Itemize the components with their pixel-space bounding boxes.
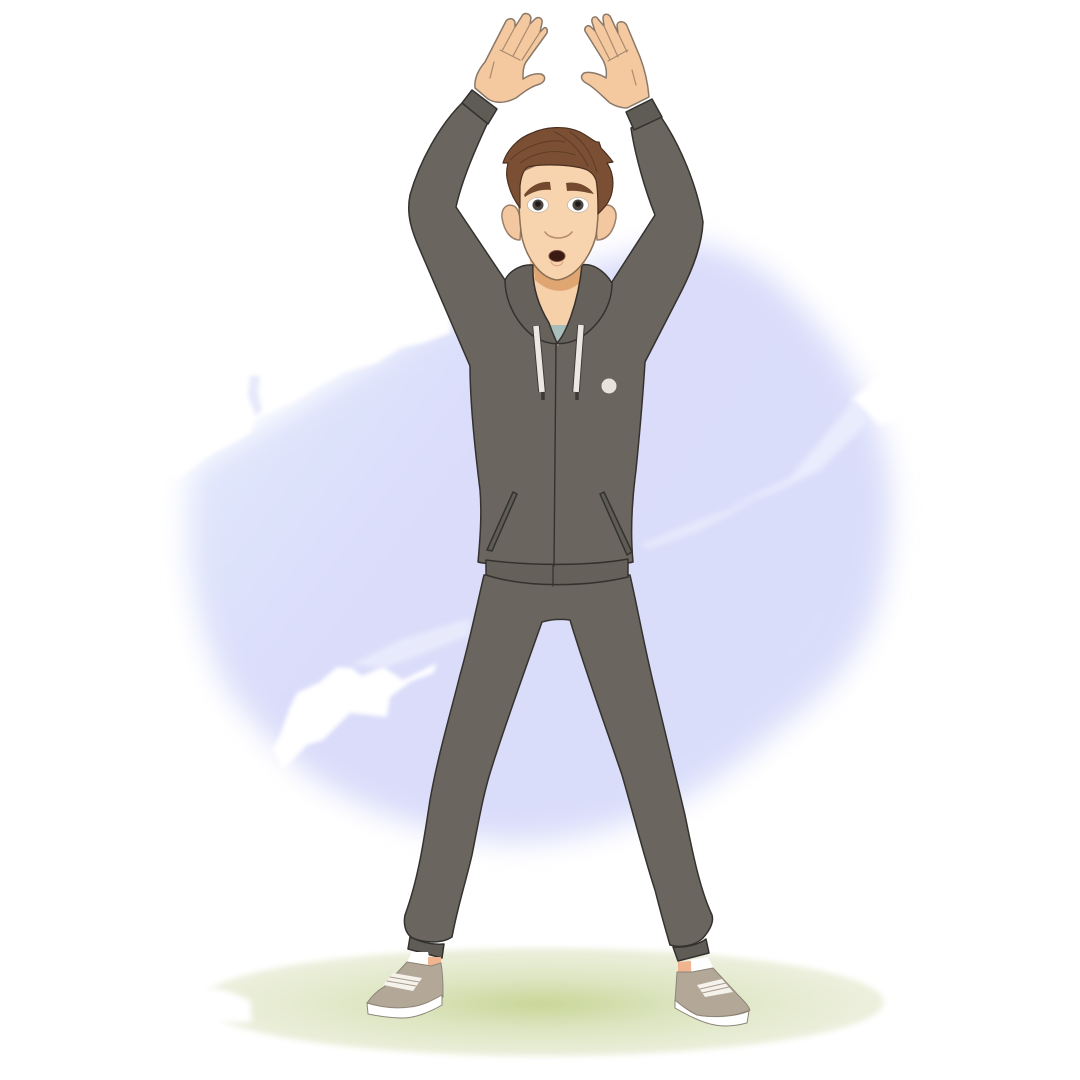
right sleeve xyxy=(605,99,703,362)
trousers xyxy=(404,575,713,961)
left ankle cuff xyxy=(408,937,444,958)
hair xyxy=(503,128,613,214)
mouth xyxy=(549,250,565,262)
hood strings xyxy=(536,325,581,400)
eyebrows xyxy=(524,182,551,197)
left pocket xyxy=(487,492,517,551)
right shoe xyxy=(675,957,750,1026)
right hand xyxy=(582,14,649,108)
right cuff xyxy=(626,99,662,130)
jacket xyxy=(470,280,645,586)
badge xyxy=(602,378,616,394)
eyes xyxy=(528,198,548,212)
face xyxy=(519,155,598,280)
left hand xyxy=(475,14,547,102)
neck and shirt xyxy=(530,250,585,346)
right pocket xyxy=(600,492,632,555)
left cuff xyxy=(462,90,497,124)
waistband xyxy=(486,559,628,585)
zipper xyxy=(554,345,556,566)
right ankle cuff xyxy=(673,939,709,961)
hood collar xyxy=(505,265,612,344)
ears xyxy=(502,205,616,240)
background: blue watercolor blob xyxy=(100,200,900,842)
nose xyxy=(545,232,572,238)
left sleeve xyxy=(409,90,510,366)
left shoe xyxy=(367,952,443,1018)
figure xyxy=(367,14,750,1026)
ground: green shadow ellipse xyxy=(190,948,884,1056)
